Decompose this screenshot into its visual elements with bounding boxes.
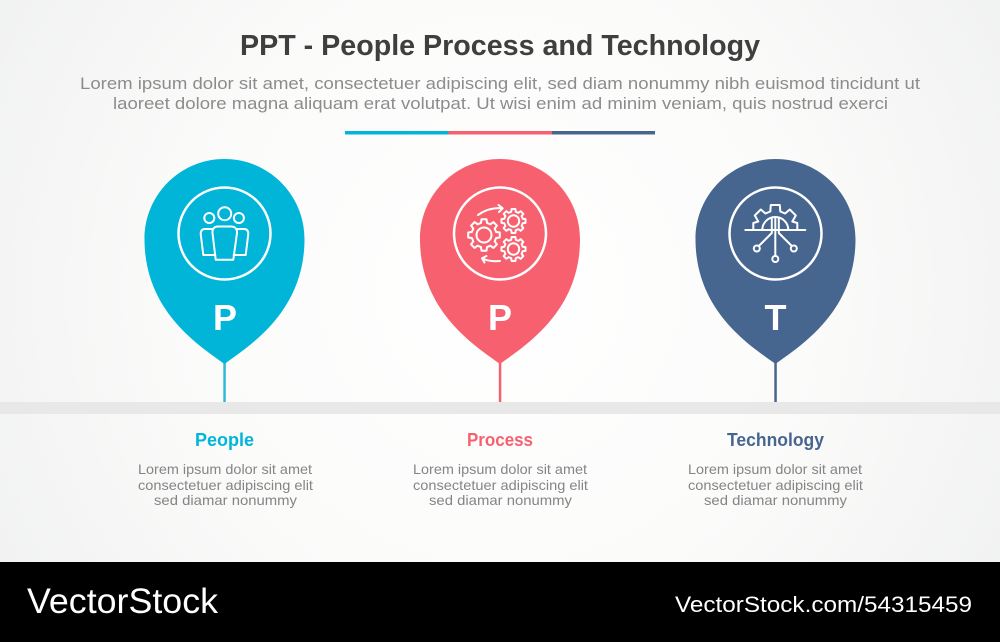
panel: people pin: [144, 159, 304, 402]
text block: people: Lorem ipsum dolor sit amet: [138, 461, 312, 477]
title: PPT - People Process and Technology: [240, 30, 760, 62]
text block: process: sed diamar nonummy: [429, 492, 572, 508]
footer watermark bar: VectorStock: [27, 582, 219, 621]
subtitle text block: [80, 74, 920, 113]
icon: gears with cycle arrows: [468, 205, 526, 262]
letter P: P: [488, 297, 512, 338]
text block: technology: Technology: [727, 430, 824, 450]
text block: technology: consectetuer adipiscing elit: [688, 477, 863, 493]
icon: people group: [201, 207, 248, 260]
panel: process pin: [420, 159, 580, 402]
text block: people: consectetuer adipiscing elit: [138, 477, 313, 493]
tri-colour title underline: [345, 131, 655, 134]
text block: technology: sed diamar nonummy: [704, 492, 847, 508]
text block: technology: Lorem ipsum dolor sit amet: [688, 461, 862, 477]
text block: technology: [688, 430, 863, 508]
panel: technology pin: [696, 159, 856, 402]
icon: half gear circuit: [745, 205, 805, 262]
text block: process: consectetuer adipiscing elit: [413, 477, 588, 493]
text block: people: People: [195, 430, 254, 450]
letter P: P: [213, 297, 237, 338]
text block: people: sed diamar nonummy: [154, 492, 297, 508]
text block: process: Process: [467, 430, 533, 450]
footer watermark bar: [0, 562, 1000, 642]
subtitle text block: laoreet dolore magna aliquam erat volutpat. Ut wisi enim ad minim veniam, quis nostrud exerci: [113, 94, 888, 113]
footer watermark bar: VectorStock.com/54315459: [675, 592, 972, 617]
text block: process: Lorem ipsum dolor sit amet: [413, 461, 587, 477]
letter T: T: [764, 297, 786, 338]
subtitle text block: Lorem ipsum dolor sit amet, consectetuer adipiscing elit, sed diam nonummy nibh euismod tincidunt ut: [80, 74, 920, 93]
text block: process: [413, 430, 588, 508]
text block: people: [138, 430, 313, 508]
